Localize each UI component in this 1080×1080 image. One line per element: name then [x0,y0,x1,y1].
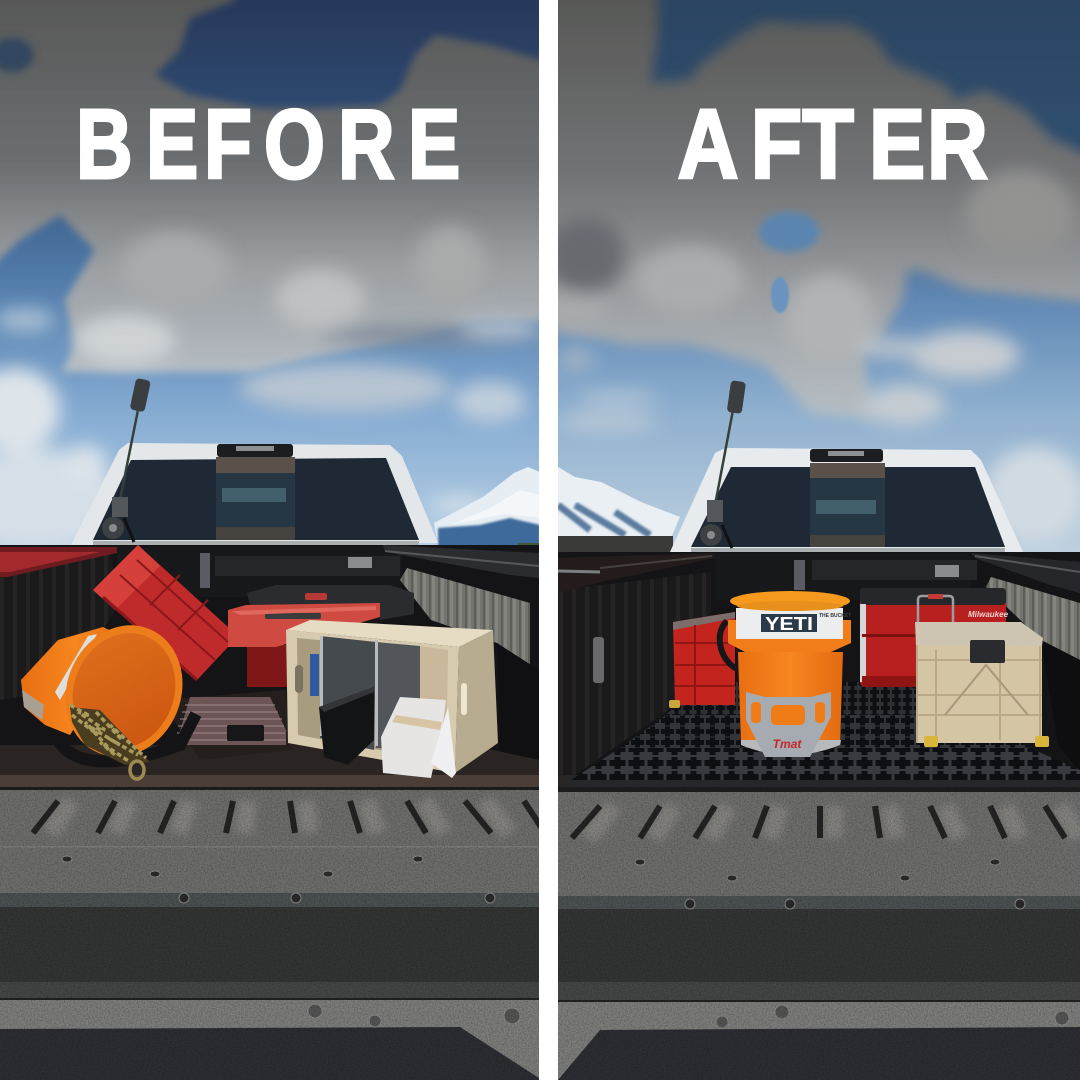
before tilted red crate [93,545,228,680]
before sky with clouds [0,0,590,552]
before beige crate on its side [286,620,498,778]
panel: after tailgate [558,787,1080,1080]
panel: before [0,0,590,790]
after red toolbox [860,588,1009,687]
after black floor mat [568,682,1080,787]
before tailgate rivets [62,856,520,1027]
after mountain [558,467,680,558]
before bed interior [0,545,539,790]
after beige crate [915,622,1049,747]
tmat bracket [746,692,831,757]
heading: before: BEFORE [76,90,460,199]
panel: before tailgate [0,787,545,1080]
yeti label [761,613,851,634]
before mountain [434,467,540,551]
before tailgate ribs [33,801,545,833]
after orange bucket [720,591,851,757]
after sky with clouds [520,0,1080,560]
before tailgate shadow [0,1027,539,1080]
after tailgate ribs [572,806,1080,838]
before orange bucket with chain [21,608,202,779]
heading: after: AFTER [678,90,988,199]
after bed interior [558,552,1080,790]
after tailgate shadow [558,1027,1080,1080]
before antenna and winch [102,378,151,542]
before floor mat [176,697,286,745]
before red toolbox [228,585,414,687]
chain spilling out [70,705,150,779]
yeti label: YETI [765,614,813,634]
yeti label: THE BUCKET [819,613,851,619]
after antenna and winch [700,380,746,548]
panel: after [520,0,1080,790]
tmat bracket: Tmat [773,737,802,751]
after tailgate rivets [635,859,1069,1028]
before bed rails [0,545,539,578]
before truck cab [71,443,438,545]
after red crate [669,612,735,708]
after bed rails [558,553,1080,593]
after truck cab [670,448,1023,552]
after red toolbox: Milwaukee [968,610,1009,619]
